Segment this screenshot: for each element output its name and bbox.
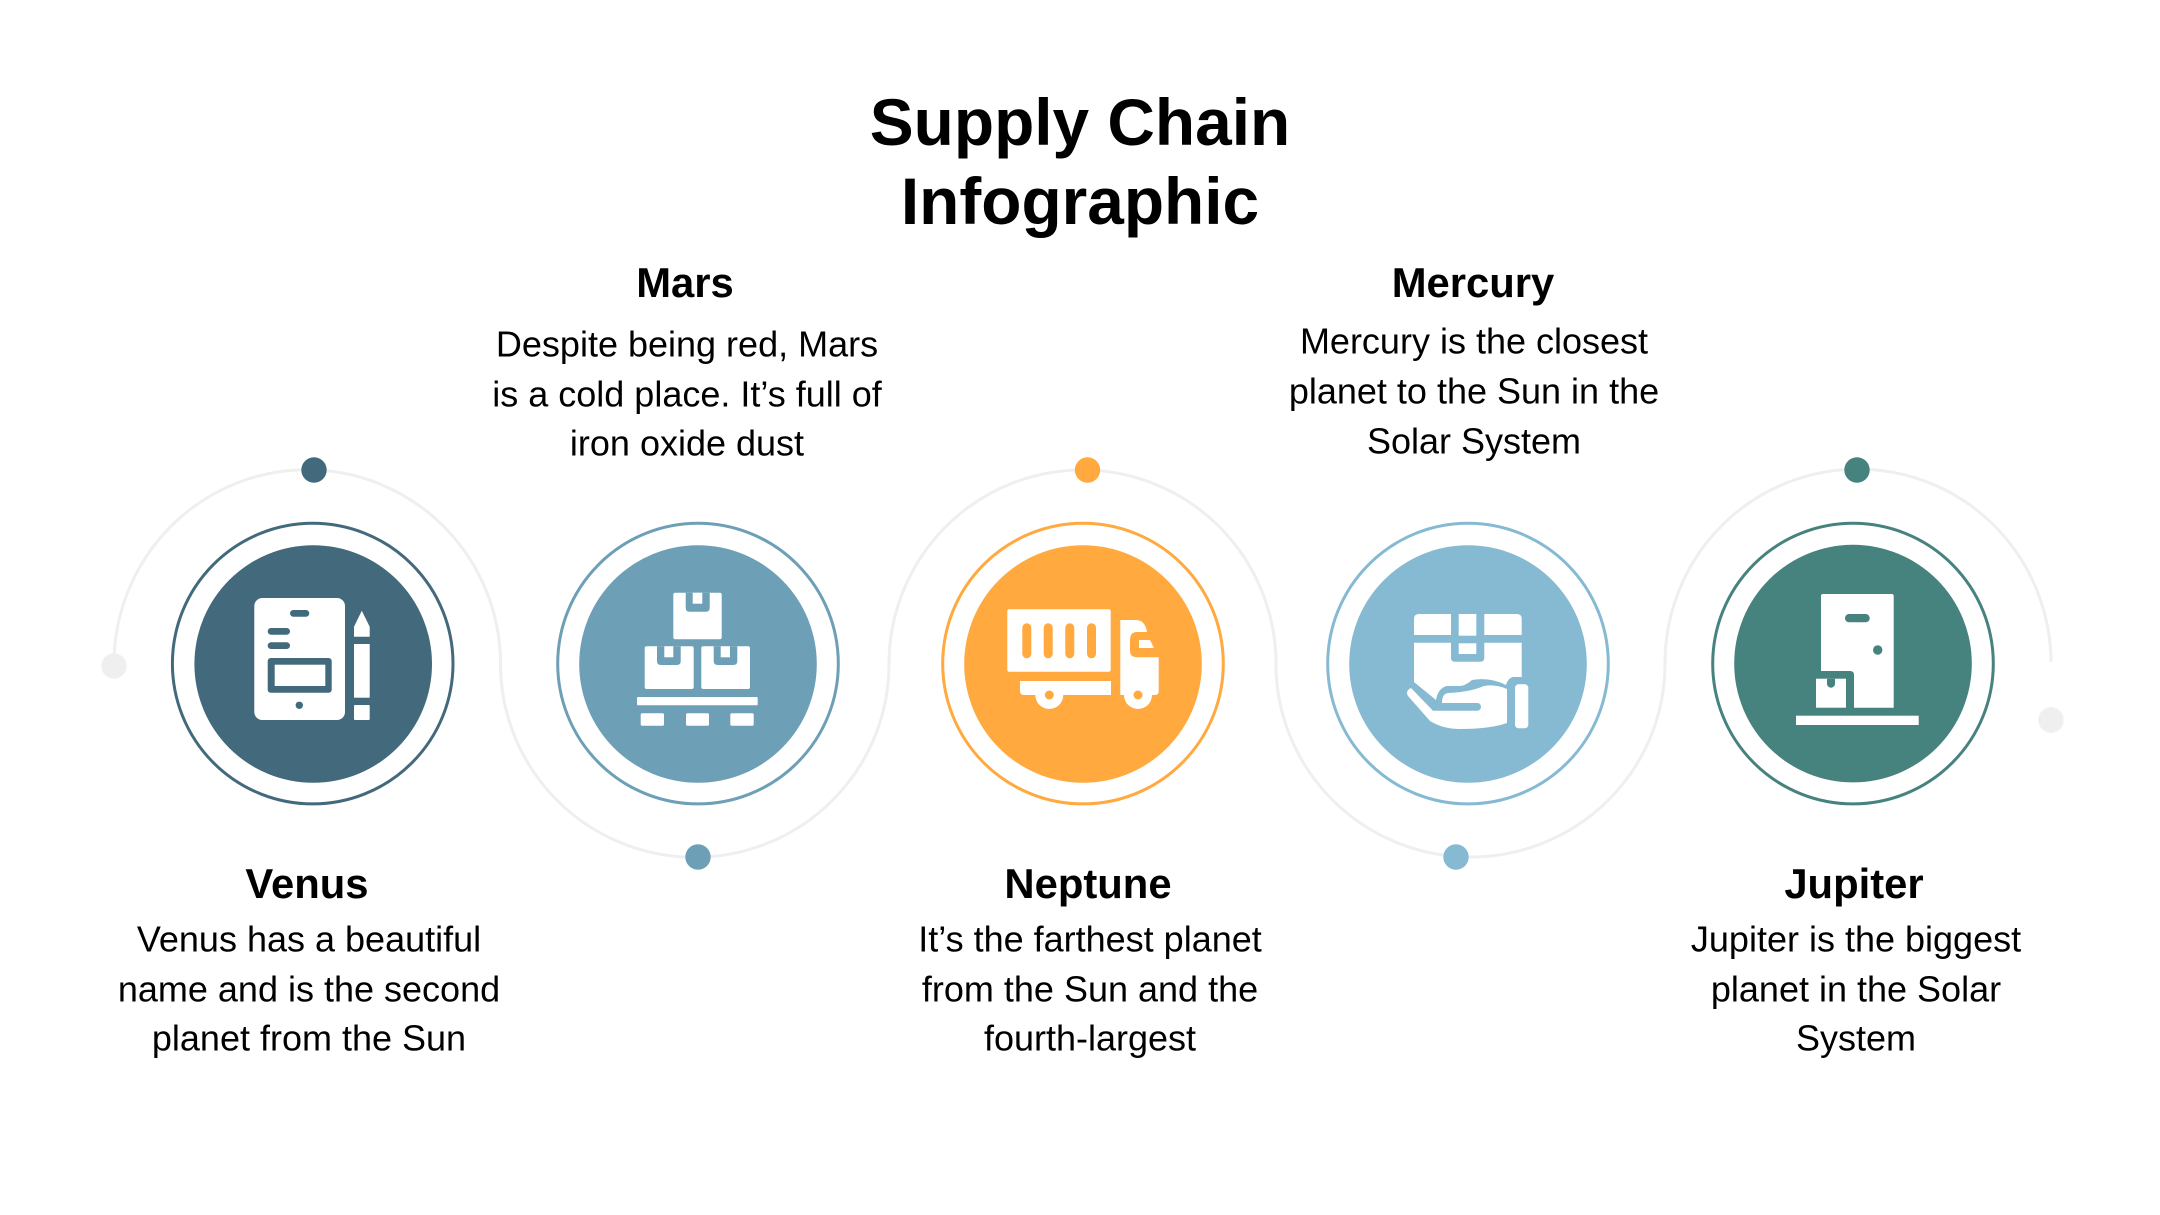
- text block: Neptune: Neptune: [1004, 860, 1172, 907]
- text block: Venus: Venus: [245, 860, 369, 907]
- panel: Venus circle: [172, 523, 453, 804]
- text block: Neptune: from the Sun and the: [922, 969, 1258, 1010]
- start dot: [101, 653, 127, 679]
- title: Infographic: [901, 164, 1259, 238]
- text block: Mars: [492, 259, 883, 464]
- end dot: [2038, 707, 2064, 733]
- node dot: Neptune: [1075, 457, 1100, 483]
- wavy connector line: [114, 469, 2051, 857]
- text block: Jupiter: [1691, 860, 2021, 1059]
- text block: Venus: planet from the Sun: [152, 1018, 466, 1059]
- text block: Jupiter: planet in the Solar: [1711, 969, 2001, 1010]
- text block: Jupiter: Jupiter: [1784, 860, 1924, 907]
- text block: Mars: is a cold place. It’s full of: [492, 374, 883, 415]
- text block: Neptune: fourth-largest: [984, 1018, 1196, 1059]
- text block: Jupiter: Jupiter is the biggest: [1691, 919, 2021, 960]
- icon: stacked boxes on pallet: [637, 593, 758, 726]
- title: [870, 85, 1290, 238]
- panel: Neptune circle: [943, 523, 1223, 804]
- text block: Mercury: planet to the Sun in the: [1289, 371, 1659, 412]
- icon: parcel at door: [1796, 594, 1919, 725]
- icon: box held in hand: [1407, 614, 1528, 729]
- text block: Mars: Mars: [636, 259, 734, 306]
- text block: Venus: name and is the second: [118, 969, 500, 1010]
- icon: tablet and pencil: [254, 598, 370, 720]
- text block: Mercury: Mercury is the closest: [1300, 321, 1648, 362]
- node dot: Jupiter: [1844, 457, 1870, 483]
- text block: Neptune: It’s the farthest planet: [918, 919, 1262, 960]
- node dot: Venus: [301, 457, 327, 483]
- text block: Mercury: Solar System: [1367, 421, 1581, 462]
- icon: delivery truck: [1007, 609, 1159, 709]
- text block: Mercury: [1289, 259, 1659, 462]
- text block: Jupiter: System: [1796, 1018, 1916, 1059]
- title: Supply Chain: [870, 85, 1290, 159]
- node dot: Mercury: [1443, 844, 1469, 870]
- text block: Venus: [118, 860, 500, 1059]
- panel: Mercury circle: [1328, 523, 1608, 804]
- text block: Mars: Despite being red, Mars: [496, 324, 878, 365]
- node dot: Mars: [685, 844, 711, 870]
- text block: Mars: iron oxide dust: [570, 423, 804, 464]
- text block: Neptune: [918, 860, 1262, 1059]
- panel: Jupiter circle: [1713, 523, 1993, 804]
- text block: Mercury: Mercury: [1392, 259, 1555, 306]
- panel: Mars circle: [558, 523, 838, 804]
- text block: Venus: Venus has a beautiful: [137, 919, 481, 960]
